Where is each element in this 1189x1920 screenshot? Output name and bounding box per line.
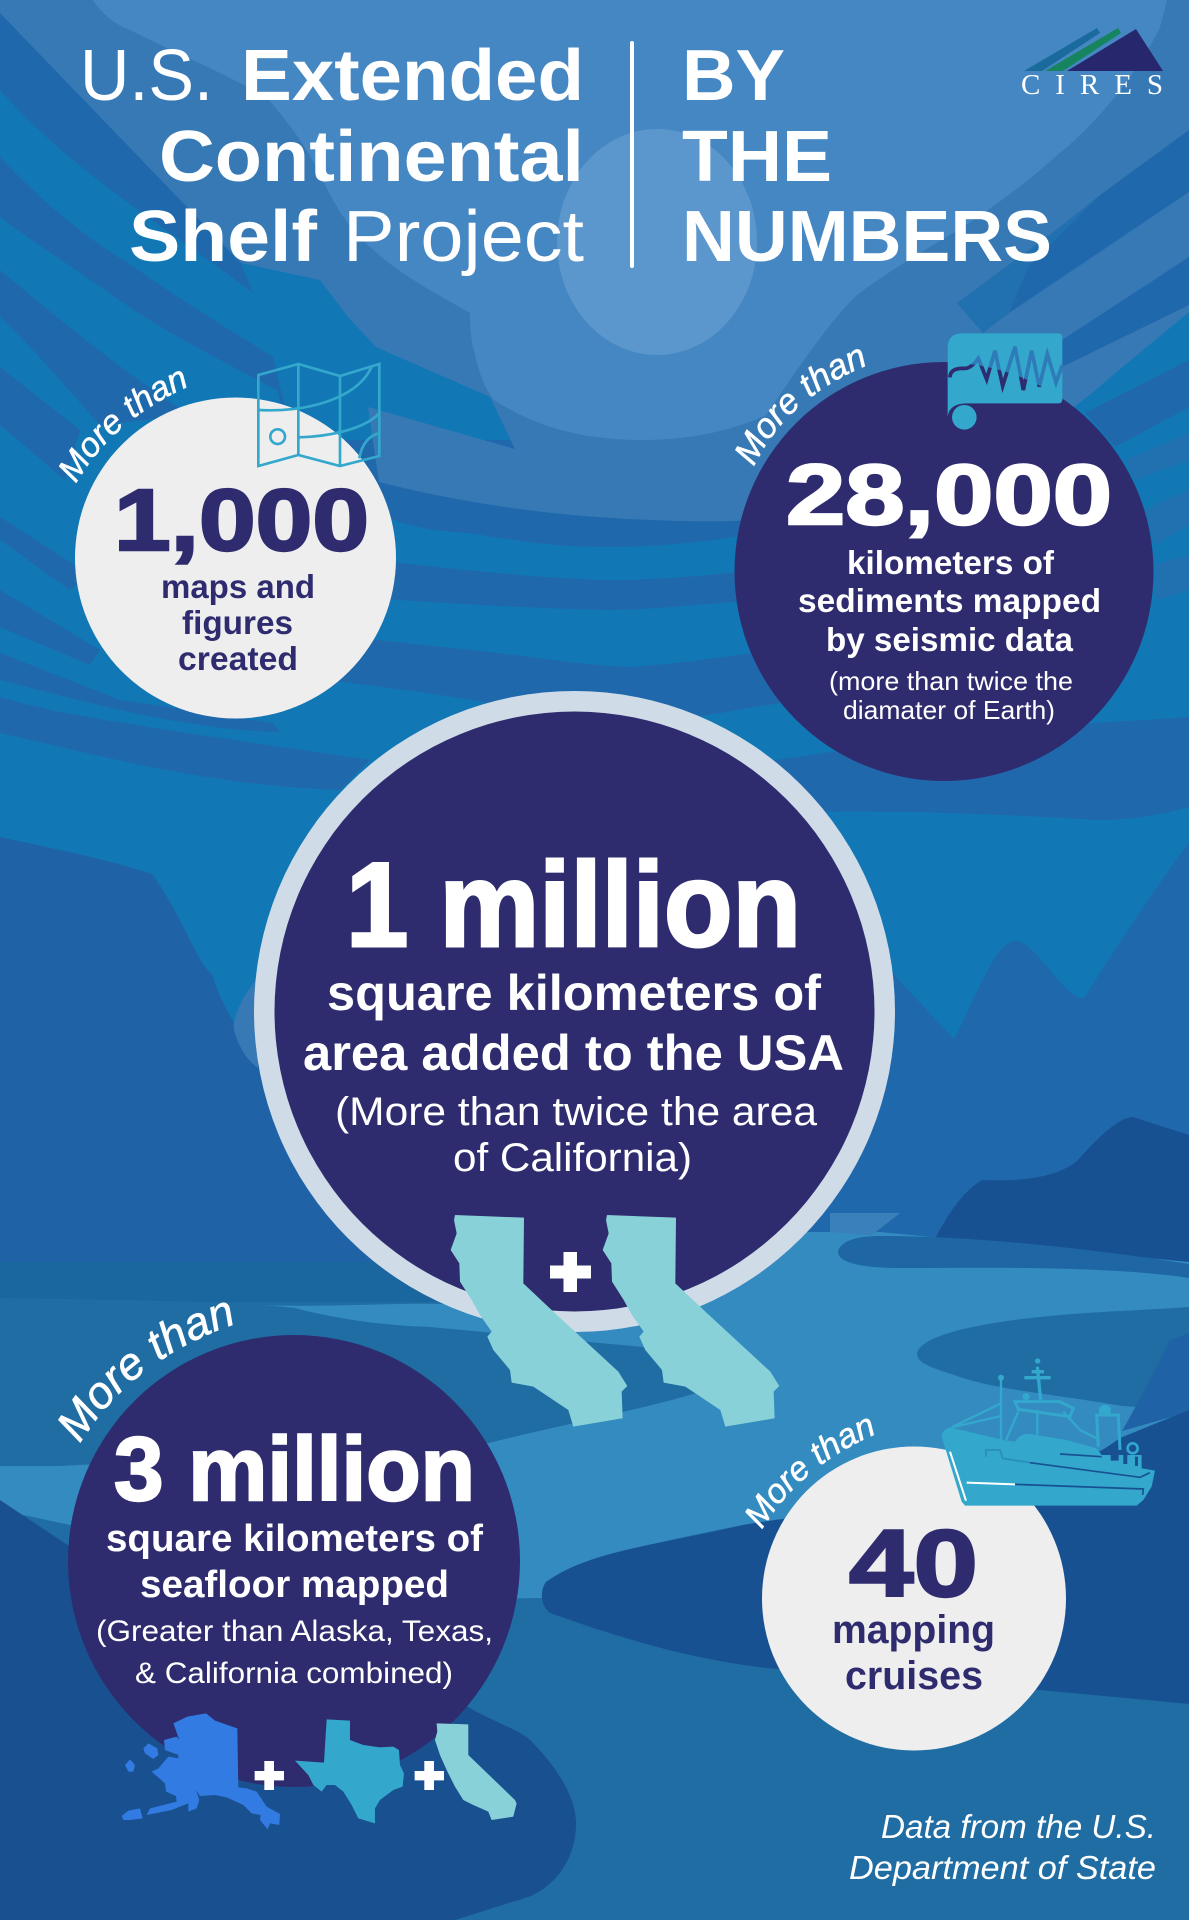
source note: Department of State	[849, 1849, 1156, 1886]
title: Extended	[241, 36, 584, 116]
background: lightest top region	[93, 0, 1167, 440]
label: more than (cruises): More than	[745, 1418, 874, 1530]
background: mid-tone shell	[0, 0, 1189, 521]
icon: folded map	[258, 364, 379, 466]
heading: by the numbers: BY	[682, 36, 785, 116]
title: Continental	[159, 117, 584, 197]
caption: square kilometers of seafloor mapped: seafloor mapped	[140, 1564, 449, 1606]
ring	[254, 691, 895, 1332]
caption: square kilometers of area added to the USA	[303, 965, 844, 1081]
source note	[849, 1808, 1156, 1886]
background: right lagoon	[542, 1410, 1189, 1704]
note: more than twice the diameter of Earth	[829, 666, 1073, 725]
caption: mapping cruises	[832, 1608, 995, 1698]
icon: Alaska	[122, 1713, 280, 1829]
icon: seismic scroll	[948, 333, 1062, 430]
background: teal land under the states	[0, 1298, 700, 1466]
logo: CIRES: CIRES	[1021, 69, 1163, 101]
icon: California right	[603, 1215, 779, 1427]
heading: by the numbers: THE	[682, 117, 832, 197]
caption: kilometers of sediments mapped by seismic data	[798, 544, 1101, 658]
heading: by the numbers: NUMBERS	[682, 197, 1052, 277]
note: twice the area of California: of California)	[453, 1136, 692, 1180]
stat: 3 million: 3 million	[114, 1420, 475, 1520]
caption: maps and figures created	[161, 568, 315, 677]
icon: plus	[550, 1252, 591, 1292]
title: Shelf	[129, 197, 318, 277]
caption: square kilometers of area added to the USA: area added to the USA	[303, 1025, 844, 1081]
icon: Texas	[295, 1719, 404, 1823]
logo: CIRES	[1021, 28, 1163, 101]
background: upper left stripes	[0, 13, 370, 790]
note: greater than Alaska, Texas and California: (Greater than Alaska, Texas,	[96, 1615, 493, 1648]
stat: 28,000: 28,000	[786, 448, 1112, 543]
icon: California	[435, 1723, 517, 1820]
note: more than twice the diameter of Earth: diamater of Earth)	[843, 695, 1055, 725]
background: right mountains	[780, 843, 1189, 1300]
note: twice the area of California	[335, 1090, 818, 1180]
panel: 3 million square kilometers of seafloor	[68, 1335, 520, 1787]
caption: mapping cruises: mapping	[832, 1608, 995, 1652]
caption: square kilometers of area added to the USA: square kilometers of	[327, 965, 821, 1021]
background: left mountain	[0, 837, 420, 1300]
note: greater than Alaska, Texas and California: & California combined)	[135, 1657, 453, 1690]
title: Project	[343, 197, 584, 277]
note: greater than Alaska, Texas and California	[96, 1615, 493, 1690]
divider	[630, 41, 634, 268]
panel: 1,000 maps and figures	[75, 398, 396, 718]
caption: maps and figures created: maps and	[161, 568, 315, 605]
note: twice the area of California: (More than twice the area	[335, 1090, 818, 1134]
background: small mountain behind the ring	[234, 980, 258, 1068]
stat: 40: 40	[849, 1511, 978, 1617]
source note: Data from the U.S.	[881, 1808, 1156, 1845]
caption: maps and figures created: created	[178, 640, 298, 677]
icon: plus	[415, 1761, 444, 1790]
background: light water	[0, 1232, 1189, 1600]
stat: 1,000: 1,000	[114, 472, 369, 569]
caption: square kilometers of seafloor mapped	[106, 1518, 483, 1606]
background: moon	[557, 129, 757, 355]
title	[80, 36, 584, 277]
background: right side stripes	[957, 130, 1189, 600]
title: U.S.	[80, 36, 213, 116]
caption: mapping cruises: cruises	[845, 1654, 983, 1698]
background: lower teal base	[0, 1280, 1189, 1920]
icon: California plus California	[451, 1215, 779, 1427]
icon: plus	[255, 1761, 284, 1790]
panel: 1 million square kilometers	[254, 691, 895, 1332]
background: centre bowl bands	[300, 440, 1189, 820]
label: more than (maps): More than	[58, 371, 186, 484]
heading: by the numbers	[682, 36, 1052, 277]
icon: California left	[451, 1215, 627, 1427]
panel: 40 mapping cruises	[762, 1446, 1066, 1750]
label: more than (seismic): More than	[735, 349, 866, 466]
caption: kilometers of sediments mapped by seismic data: kilometers of	[847, 544, 1055, 581]
label: more than (seafloor): More than	[58, 1302, 233, 1443]
background: shoreline shapes	[830, 1213, 900, 1235]
stat: 1 million: 1 million	[346, 838, 801, 972]
icon: research ship	[942, 1358, 1155, 1506]
background: bottom left lake	[0, 1500, 576, 1920]
caption: kilometers of sediments mapped by seismic data: sediments mapped	[798, 582, 1101, 619]
caption: kilometers of sediments mapped by seismic data: by seismic data	[826, 621, 1074, 658]
note: more than twice the diameter of Earth: (more than twice the	[829, 666, 1073, 696]
caption: maps and figures created: figures	[182, 604, 293, 641]
icons: Alaska, Texas, California	[122, 1713, 517, 1829]
panel: 28,000 kilometers of sediments	[734, 362, 1154, 781]
caption: square kilometers of seafloor mapped: square kilometers of	[106, 1518, 483, 1560]
